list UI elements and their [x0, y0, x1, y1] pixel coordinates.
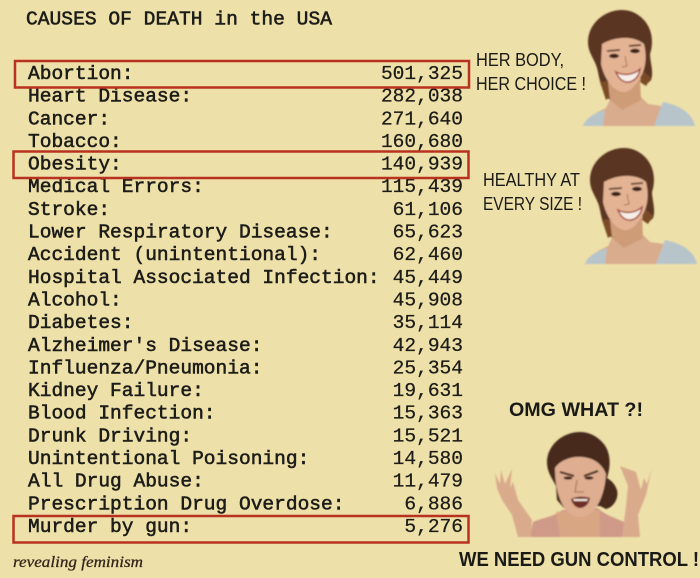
table of causes: Alzheimer's Disease:	[28, 335, 262, 357]
icon: smiling woman 1	[583, 10, 695, 126]
table of causes: Drunk Driving:	[28, 425, 192, 447]
table of causes: 14,580	[393, 448, 463, 470]
table of causes: Unintentional Poisoning:	[28, 448, 309, 470]
table of causes: Diabetes:	[28, 312, 134, 334]
highlight box: obesity	[14, 152, 468, 178]
table of causes: Lower Respiratory Disease:	[28, 222, 333, 244]
icon: smiling woman 2	[585, 148, 697, 264]
caption: her body her choice: HER CHOICE !	[476, 74, 586, 94]
table of causes: Murder by gun:	[28, 516, 192, 538]
table of causes: 42,943	[393, 335, 463, 357]
icon: upset woman with raised hands	[495, 432, 652, 537]
table of causes: Kidney Failure:	[28, 380, 204, 402]
table of causes: 5,276	[404, 516, 463, 538]
table of causes: 140,939	[381, 154, 463, 176]
table of causes: Accident (unintentional):	[28, 244, 321, 266]
table of causes: 160,680	[381, 131, 463, 153]
table of causes: 271,640	[381, 108, 463, 130]
table of causes: 25,354	[393, 357, 463, 379]
table of causes: 6,886	[404, 493, 463, 515]
watermark: revealing feminism: revealing feminism	[13, 554, 143, 571]
table of causes: Tobacco:	[28, 131, 122, 153]
table of causes: 65,623	[393, 222, 463, 244]
table of causes: 35,114	[393, 312, 463, 334]
table of causes: 115,439	[381, 176, 463, 198]
caption: healthy at every size	[483, 170, 582, 214]
table of causes: Obesity:	[28, 154, 122, 176]
highlight box: murder by gun	[14, 516, 468, 542]
title: CAUSES OF DEATH in the USA	[26, 8, 332, 30]
table of causes: 15,521	[393, 425, 463, 447]
table of causes: Cancer:	[28, 108, 110, 130]
caption: healthy at every size: EVERY SIZE !	[483, 194, 582, 214]
table of causes: 15,363	[393, 403, 463, 425]
table of causes: 45,449	[393, 267, 463, 289]
table of causes: All Drug Abuse:	[28, 471, 204, 493]
table of causes: Alcohol:	[28, 290, 122, 312]
table of causes	[28, 63, 463, 538]
table of causes: Influenza/Pneumonia:	[28, 357, 262, 379]
table of causes: 45,908	[393, 290, 463, 312]
table of causes: 501,325	[381, 63, 463, 85]
table of causes: Heart Disease:	[28, 86, 192, 108]
table of causes: Medical Errors:	[28, 176, 204, 198]
table of causes: Stroke:	[28, 199, 110, 221]
heading: omg what: OMG WHAT ?!	[509, 400, 643, 421]
table of causes: 282,038	[381, 86, 463, 108]
table of causes: Prescription Drug Overdose:	[28, 493, 344, 515]
table of causes: 62,460	[393, 244, 463, 266]
table of causes: 61,106	[393, 199, 463, 221]
table of causes: 11,479	[393, 471, 463, 493]
caption: her body her choice: HER BODY,	[476, 50, 564, 70]
caption: her body her choice	[476, 50, 586, 94]
table of causes: Blood Infection:	[28, 403, 216, 425]
caption: healthy at every size: HEALTHY AT	[483, 170, 580, 190]
table of causes: Abortion:	[28, 63, 134, 85]
table of causes: Hospital Associated Infection:	[28, 267, 380, 289]
table of causes: 19,631	[393, 380, 463, 402]
highlight box: abortion	[15, 61, 469, 88]
